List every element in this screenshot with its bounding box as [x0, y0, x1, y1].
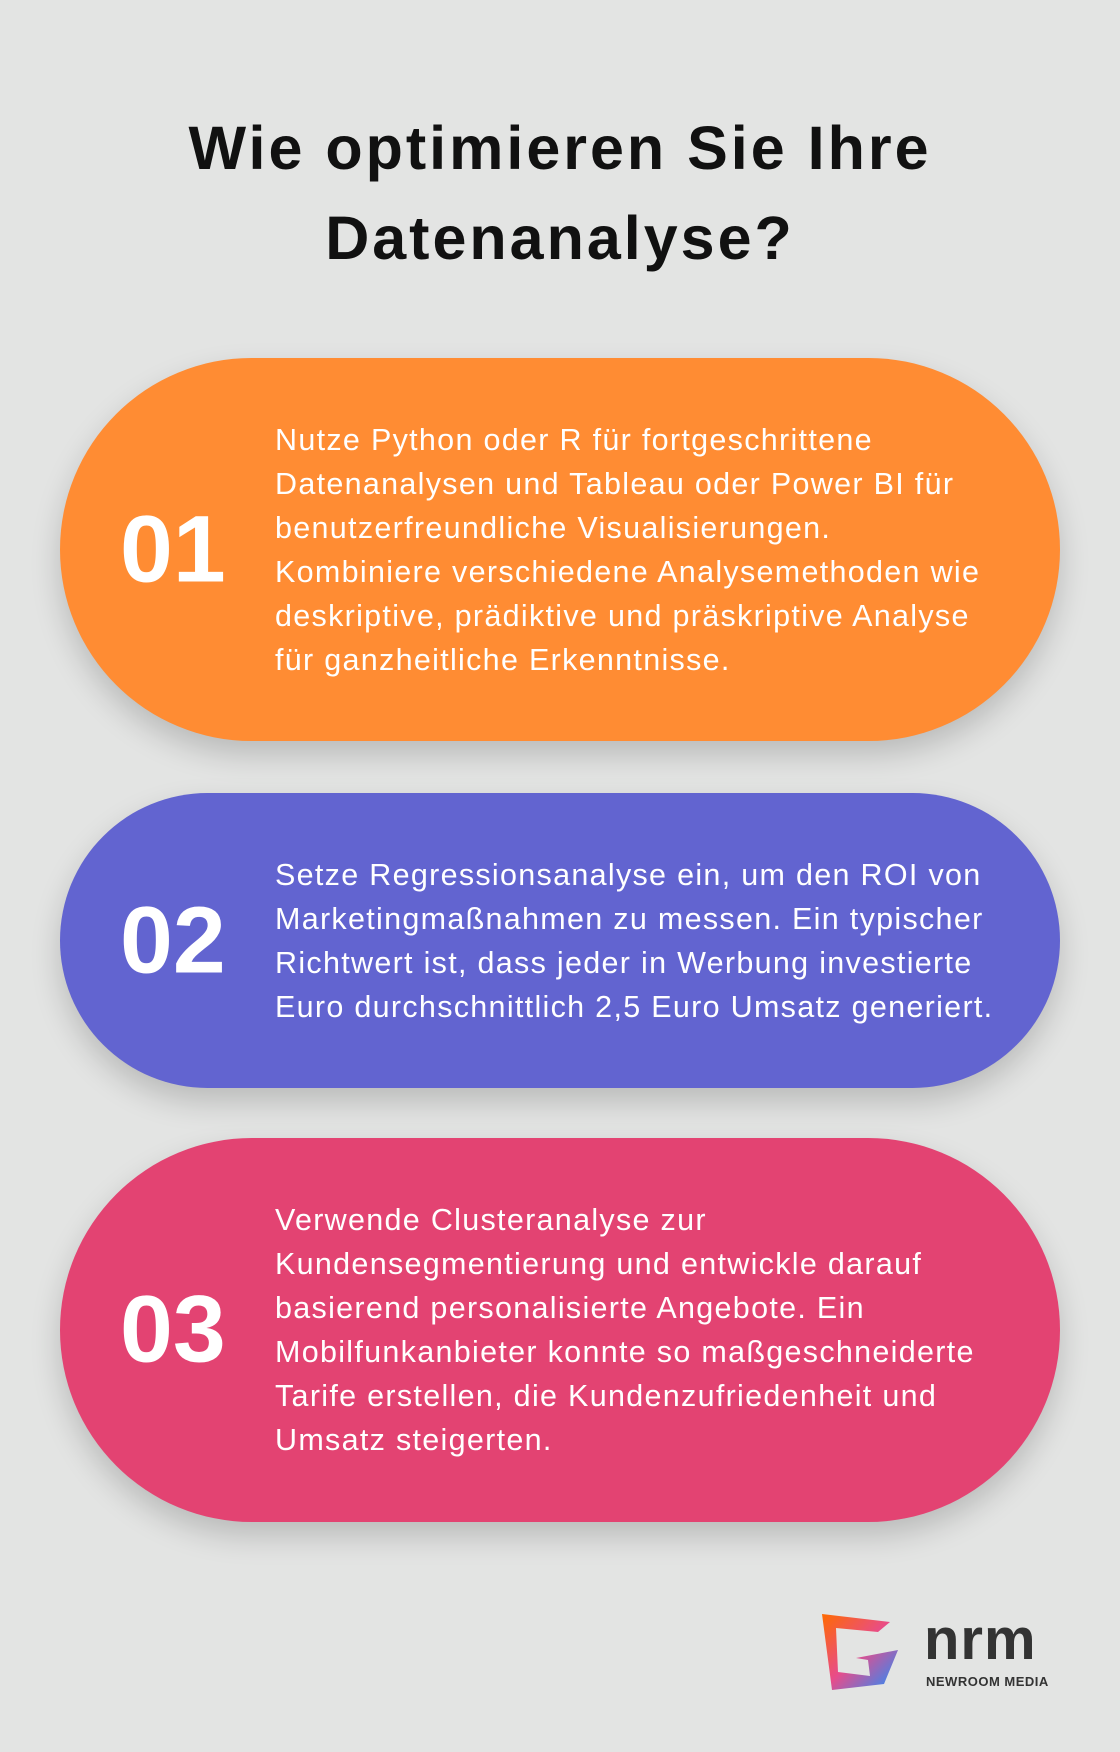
text 03: Umsatz steigerten. [275, 1423, 553, 1457]
text 02: Euro durchschnittlich 2,5 Euro Umsatz generiert. [275, 990, 993, 1024]
text 01: Nutze Python oder R für fortgeschrittene [275, 422, 873, 456]
panel: step 03 [60, 1138, 1060, 1522]
text 01: Kombiniere verschiedene Analysemethoden wie [275, 554, 980, 588]
panel: step 01 [60, 358, 1060, 741]
text 02: Marketingmaßnahmen zu messen. Ein typischer [275, 902, 984, 936]
text 01: deskriptive, prädiktive und präskriptive Analyse [275, 598, 970, 632]
logo [822, 1607, 1049, 1690]
text 03: Verwende Clusteranalyse zur [275, 1203, 707, 1237]
text 03 [275, 1203, 975, 1457]
text 01: Datenanalysen und Tableau oder Power BI für [275, 466, 954, 500]
title: Wie optimieren Sie Ihre [188, 114, 932, 182]
text 03: Tarife erstellen, die Kundenzufriedenheit und [275, 1379, 937, 1413]
title: Datenanalyse? [325, 204, 795, 272]
text 01: benutzerfreundliche Visualisierungen. [275, 510, 831, 544]
logo text: nrm [924, 1607, 1037, 1672]
text 03: basierend personalisierte Angebote. Ein [275, 1291, 865, 1325]
text 03: Kundensegmentierung und entwickle darauf [275, 1247, 922, 1281]
text 03: Mobilfunkanbieter konnte so maßgeschneiderte [275, 1335, 975, 1369]
text 02 [275, 858, 993, 1024]
title [188, 114, 932, 272]
panel: step 02 [60, 793, 1060, 1088]
number 01: 01 [120, 496, 226, 602]
number 03: 03 [120, 1276, 226, 1382]
text 01: für ganzheitliche Erkenntnisse. [275, 642, 731, 676]
icon: logo mark [822, 1614, 898, 1690]
number 02: 02 [120, 887, 226, 993]
text 02: Setze Regressionsanalyse ein, um den ROI von [275, 858, 982, 892]
logo: NEWROOM MEDIA [926, 1674, 1049, 1689]
text 02: Richtwert ist, dass jeder in Werbung investierte [275, 946, 973, 980]
text 01 [275, 422, 980, 676]
